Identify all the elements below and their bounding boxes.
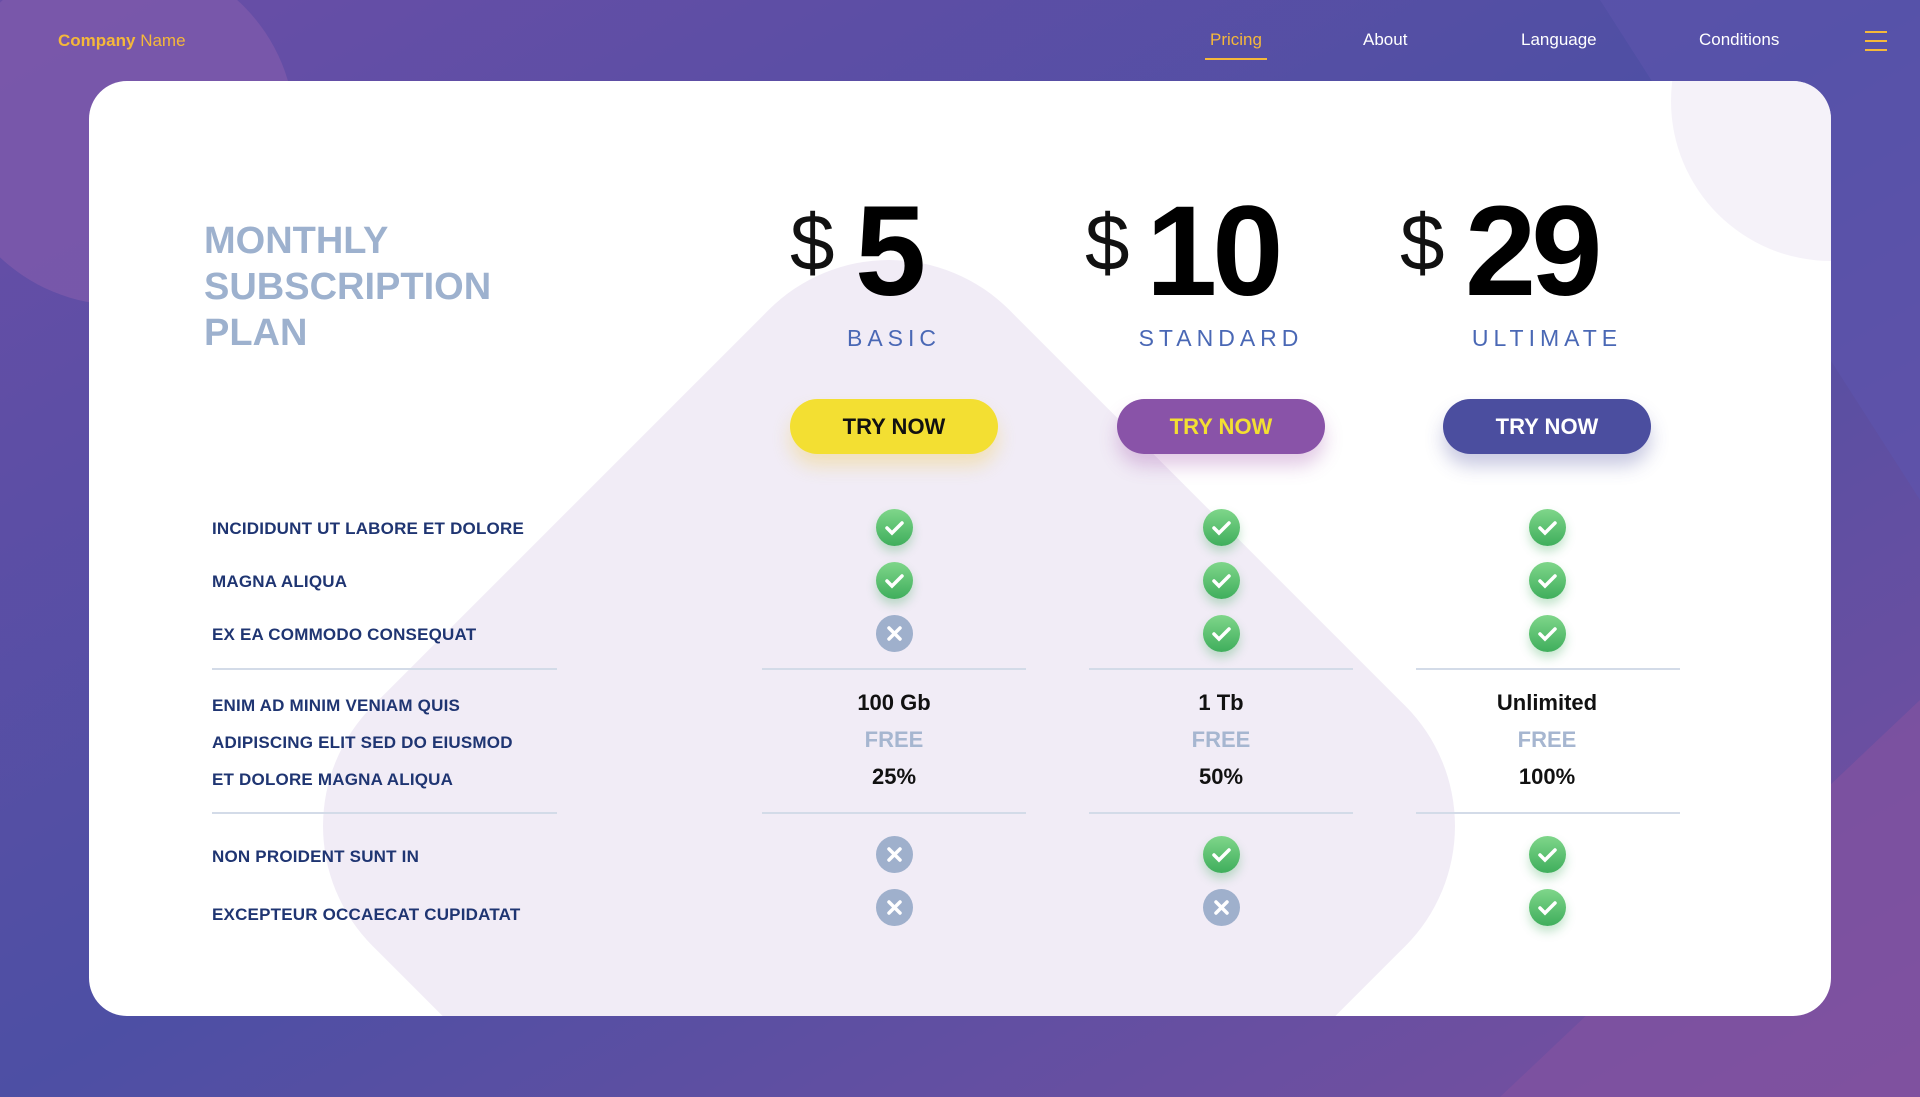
text: ET DOLORE MAGNA ALIQUA bbox=[212, 770, 453, 789]
text: MAGNA ALIQUA bbox=[212, 572, 347, 591]
title: PLAN bbox=[204, 312, 307, 354]
price basic bbox=[790, 180, 923, 323]
buttons bbox=[781, 399, 1659, 476]
brand: Company Name bbox=[58, 31, 186, 50]
text: BASIC bbox=[847, 325, 941, 351]
price ultimate bbox=[1400, 180, 1598, 323]
text: ENIM AD MINIM VENIAM QUIS bbox=[212, 696, 460, 715]
text: $ bbox=[1085, 198, 1130, 287]
icon: menu bbox=[1865, 31, 1887, 51]
text: $ bbox=[1400, 198, 1444, 287]
nav: About: About bbox=[1363, 30, 1407, 49]
text: $ bbox=[790, 198, 834, 287]
title bbox=[204, 220, 491, 354]
text: EX EA COMMODO CONSEQUAT bbox=[212, 625, 476, 644]
icons bbox=[872, 509, 1570, 936]
nav: Pricing bbox=[1205, 30, 1267, 60]
values bbox=[857, 690, 1597, 789]
text: TRY NOW bbox=[1170, 414, 1272, 439]
plan names bbox=[847, 325, 1622, 351]
text: ADIPISCING ELIT SED DO EIUSMOD bbox=[212, 733, 513, 752]
text: TRY NOW bbox=[1496, 414, 1598, 439]
nav: Conditions: Conditions bbox=[1699, 30, 1779, 49]
feature labels bbox=[212, 519, 524, 924]
text: 100% bbox=[1519, 764, 1575, 789]
nav: Language: Language bbox=[1521, 30, 1597, 49]
title: MONTHLY bbox=[204, 220, 388, 262]
title: SUBSCRIPTION bbox=[204, 266, 491, 308]
text: Unlimited bbox=[1497, 690, 1597, 715]
text: INCIDIDUNT UT LABORE ET DOLORE bbox=[212, 519, 524, 538]
text: 1 Tb bbox=[1198, 690, 1244, 715]
text: NON PROIDENT SUNT IN bbox=[212, 847, 419, 866]
text: TRY NOW bbox=[843, 414, 945, 439]
text: 29 bbox=[1465, 180, 1597, 323]
text: 10 bbox=[1146, 180, 1278, 323]
card bbox=[89, 81, 1831, 1016]
price standard bbox=[1085, 180, 1278, 323]
text: 5 bbox=[855, 180, 921, 323]
text: FREE bbox=[1192, 727, 1250, 752]
text: STANDARD bbox=[1139, 325, 1303, 351]
text: 50% bbox=[1199, 764, 1243, 789]
dividers bbox=[212, 634, 1680, 814]
nav: Pricing: Pricing bbox=[1210, 30, 1262, 49]
text: FREE bbox=[1518, 727, 1576, 752]
text: 25% bbox=[872, 764, 916, 789]
text: FREE bbox=[865, 727, 923, 752]
text: 100 Gb bbox=[857, 690, 931, 715]
text: EXCEPTEUR OCCAECAT CUPIDATAT bbox=[212, 905, 520, 924]
text: ULTIMATE bbox=[1472, 325, 1622, 351]
